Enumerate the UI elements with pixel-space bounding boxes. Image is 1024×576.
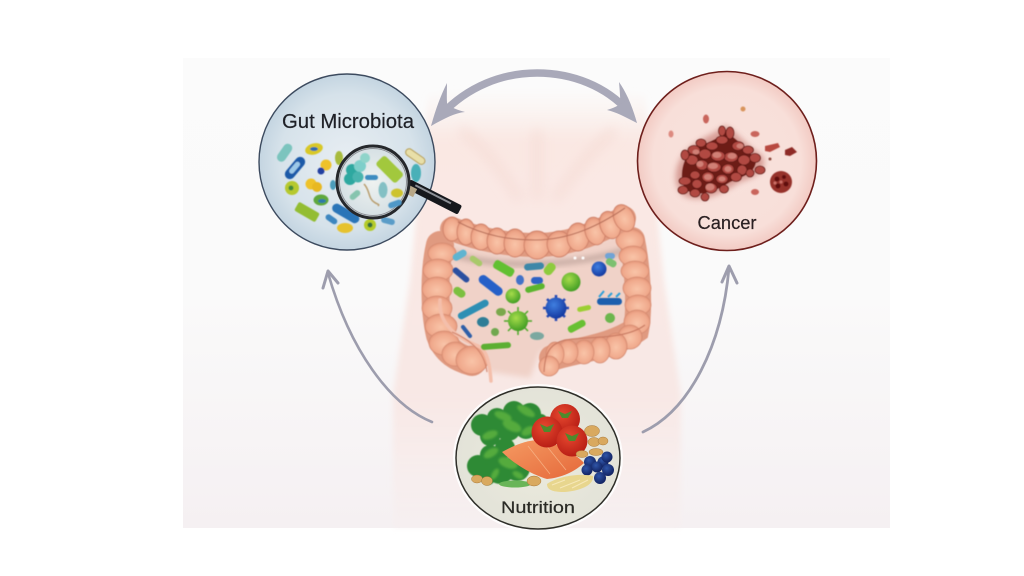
- panel: cancer circle: [638, 72, 816, 250]
- colon bacteria: [451, 248, 622, 350]
- tumor cluster: [668, 106, 797, 201]
- body torso silhouette: [393, 88, 681, 528]
- microbes: [275, 141, 426, 233]
- colon illustration: [422, 201, 651, 381]
- arrow: nutrition to gut microbiota: [323, 271, 432, 422]
- salmon fillet: [502, 440, 584, 479]
- grains: [547, 475, 593, 492]
- arrow: two-way between gut microbiota and cancer: [431, 73, 637, 126]
- colon inner cavity: [445, 228, 635, 378]
- nuts: [472, 426, 608, 486]
- heading: gut microbiota: Gut Microbiota: [282, 111, 415, 133]
- blueberries: [582, 452, 614, 484]
- leafy greens: [467, 401, 547, 488]
- panel: gut microbiota circle: [259, 74, 462, 250]
- heading: nutrition: Nutrition: [501, 498, 575, 517]
- panel: nutrition circle: [453, 384, 623, 532]
- magnifying glass: [337, 146, 462, 218]
- magnified microbes: [344, 153, 404, 209]
- panel: background: [183, 58, 890, 528]
- ascending colon: [422, 243, 491, 381]
- descending and sigmoid colon: [539, 229, 651, 376]
- transverse colon: [443, 201, 639, 259]
- arrow: nutrition to cancer: [643, 266, 737, 432]
- heading: cancer: Cancer: [698, 213, 756, 233]
- tomatoes: [532, 404, 588, 456]
